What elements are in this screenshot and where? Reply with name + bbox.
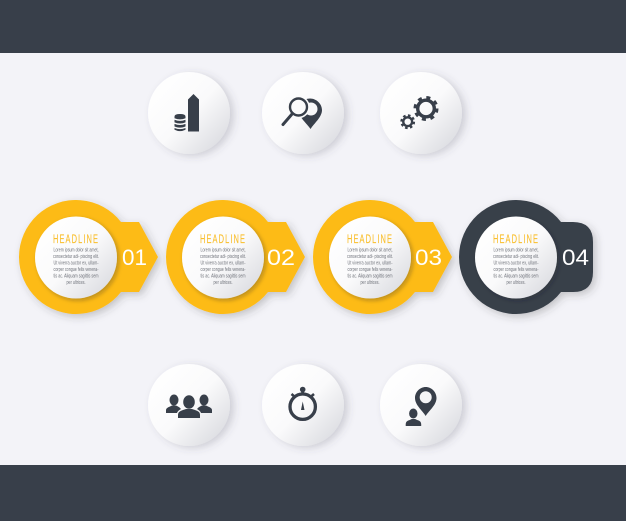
- number: 02: [267, 245, 295, 270]
- body text: corper congue felis venena-: [348, 267, 393, 273]
- body text: consectetur adi- piscing elit.: [347, 254, 393, 260]
- body text: consectetur adi- piscing elit.: [53, 254, 99, 260]
- body text: Ut viverra auctor ex, ullam-: [348, 260, 393, 266]
- icon disc: magnifier and pin: [262, 72, 344, 154]
- inner disc: [182, 216, 264, 298]
- yellow badge: [19, 200, 158, 314]
- body text: Ut viverra auctor ex, ullam-: [200, 260, 246, 266]
- icon disc: gears: [380, 72, 462, 154]
- body text: tis ac. Aliquam sagittis sem: [494, 274, 539, 280]
- body text: Ut viverra auctor ex, ullam-: [54, 260, 99, 266]
- background panel: [0, 53, 626, 465]
- step 04: [459, 200, 593, 314]
- body text: [53, 248, 99, 286]
- headline: HEADLINE: [53, 233, 99, 247]
- headline: HEADLINE: [493, 233, 539, 247]
- body text: per ultrices.: [66, 280, 86, 286]
- body text: Lorem ipsum dolor sit amet,: [54, 248, 99, 254]
- yellow badge: [313, 200, 452, 314]
- body text: corper congue felis venena-: [200, 267, 246, 273]
- body text: consectetur adi- piscing elit.: [493, 254, 539, 260]
- bottom band: [0, 465, 626, 521]
- icon disc: stopwatch: [262, 364, 344, 446]
- body text: Ut viverra auctor ex, ullam-: [494, 260, 539, 266]
- body text: [347, 248, 393, 286]
- number: 04: [562, 245, 589, 270]
- dark badge: [459, 200, 593, 314]
- inner disc: [35, 216, 117, 298]
- icon disc: coins and tower: [148, 72, 230, 154]
- body text: Lorem ipsum dolor sit amet,: [494, 248, 539, 254]
- number: 03: [415, 245, 442, 270]
- inner disc: [329, 216, 411, 298]
- number: 01: [122, 245, 147, 270]
- icon disc: location and person: [380, 364, 462, 446]
- step 02: [166, 200, 305, 314]
- body text: Lorem ipsum dolor sit amet,: [200, 248, 246, 254]
- body text: per ultrices.: [360, 280, 380, 286]
- headline: HEADLINE: [200, 233, 246, 247]
- body text: Lorem ipsum dolor sit amet,: [348, 248, 393, 254]
- body text: [493, 248, 539, 286]
- body text: per ultrices.: [214, 280, 233, 286]
- body text: corper congue felis venena-: [54, 267, 99, 273]
- step 03: [313, 200, 452, 314]
- body text: tis ac. Aliquam sagittis sem: [200, 274, 246, 280]
- yellow badge: [166, 200, 305, 314]
- body text: [200, 248, 246, 286]
- body text: consectetur adi- piscing elit.: [200, 254, 246, 260]
- step 01: [19, 200, 158, 314]
- body text: tis ac. Aliquam sagittis sem: [54, 274, 99, 280]
- top band: [0, 0, 626, 53]
- body text: corper congue felis venena-: [494, 267, 539, 273]
- body text: tis ac. Aliquam sagittis sem: [348, 274, 393, 280]
- icon disc: team: [148, 364, 230, 446]
- body text: per ultrices.: [506, 280, 526, 286]
- headline: HEADLINE: [347, 233, 393, 247]
- inner disc: [475, 216, 557, 298]
